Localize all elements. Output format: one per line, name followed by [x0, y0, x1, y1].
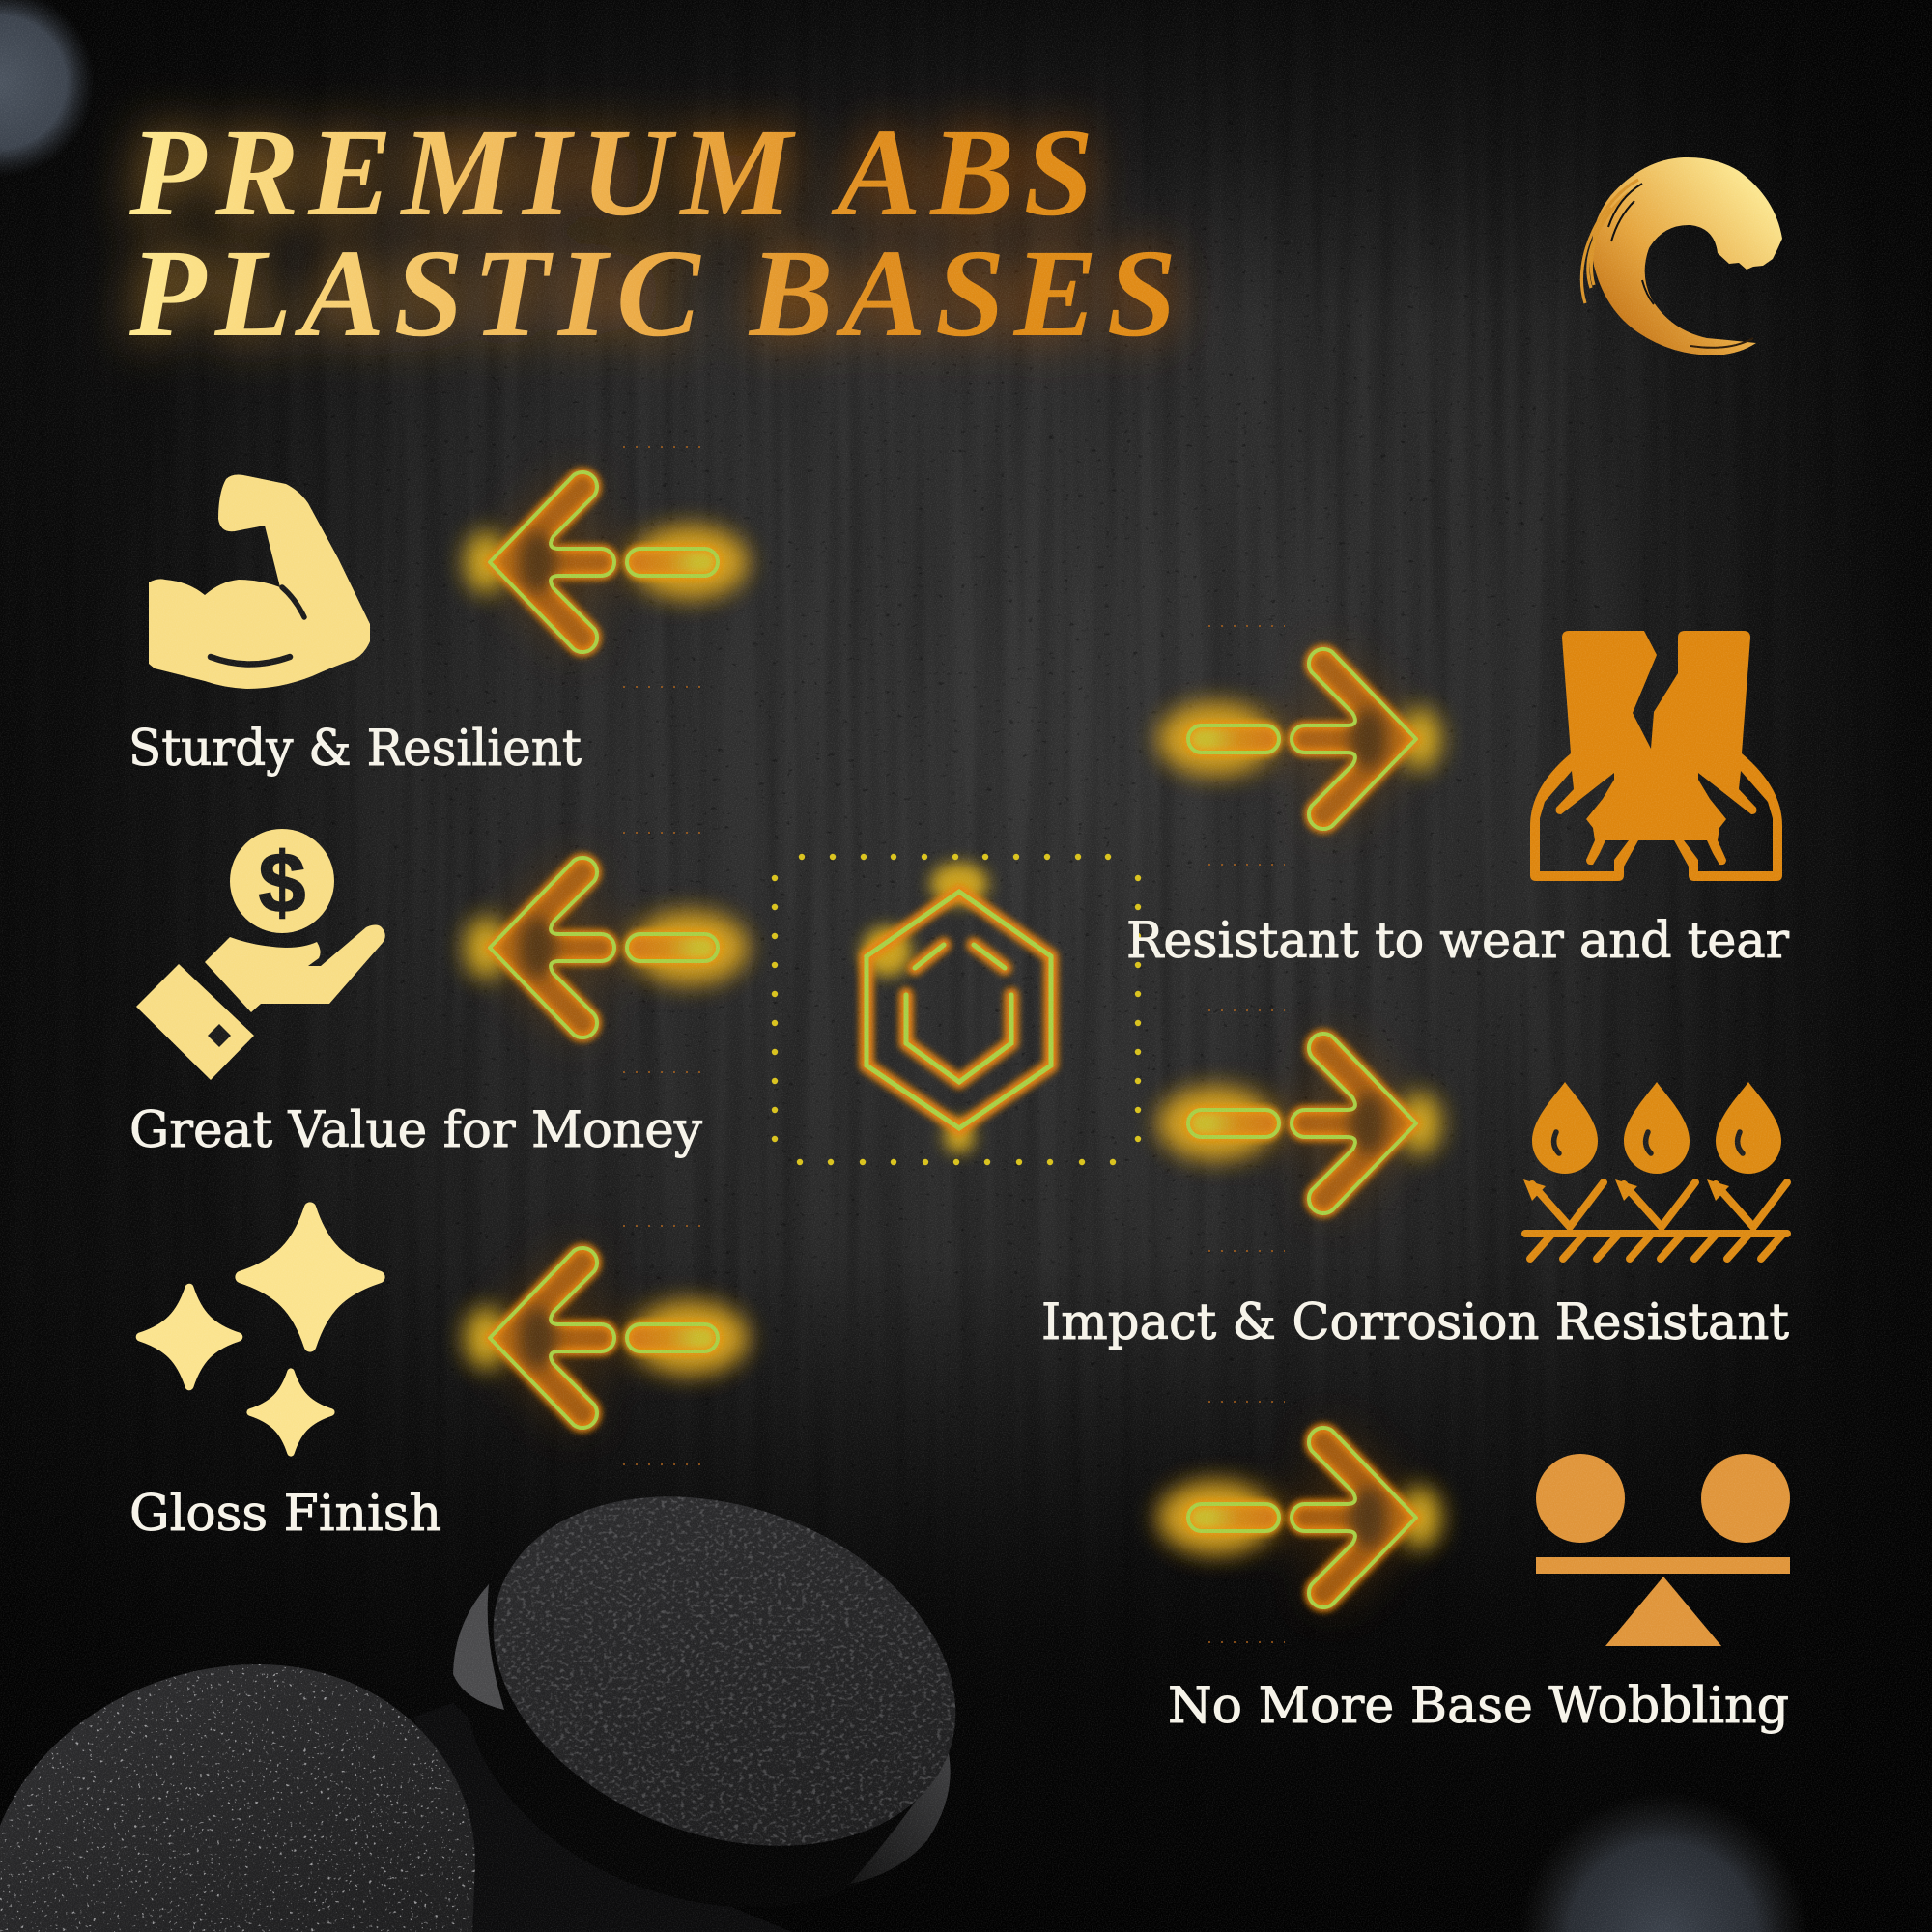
arrow: right 3 — [1157, 1428, 1441, 1607]
logo: gold brush wave — [1581, 157, 1782, 355]
icon: flexed bicep — [149, 475, 370, 689]
title — [128, 103, 1177, 363]
arrow: right 1 — [1157, 649, 1441, 829]
arrow: left 2 — [465, 858, 749, 1037]
base disc: left — [0, 1642, 792, 1932]
arrow: left 1 — [465, 472, 749, 652]
arrow: left 3 — [465, 1248, 749, 1428]
title: PREMIUM ABS — [128, 103, 1094, 242]
icon: coin in hand: $ — [259, 835, 305, 930]
label: no more base wobbling: No More Base Wobbling — [1168, 1678, 1789, 1735]
arrow: right 2 — [1157, 1034, 1441, 1213]
center: neon hexagon with dotted frame — [772, 854, 1141, 1165]
label: gloss finish: Gloss Finish — [129, 1486, 441, 1543]
icon: drops repelled from surface — [1523, 1082, 1787, 1259]
icon: coin in hand — [136, 829, 385, 1080]
label: impact and corrosion resistant: Impact & Corrosion Resistant — [1041, 1294, 1789, 1351]
icon: hands breaking block — [1530, 631, 1782, 881]
label: resistant to wear and tear: Resistant to wear and tear — [1126, 913, 1790, 970]
icon: sparkles — [140, 1208, 379, 1453]
label: great value for money: Great Value for Money — [129, 1102, 702, 1159]
base disc: right — [453, 1496, 956, 1905]
label: sturdy and resilient: Sturdy & Resilient — [128, 721, 582, 778]
title: PLASTIC BASES — [128, 224, 1177, 363]
icon: balance scale — [1536, 1454, 1790, 1646]
